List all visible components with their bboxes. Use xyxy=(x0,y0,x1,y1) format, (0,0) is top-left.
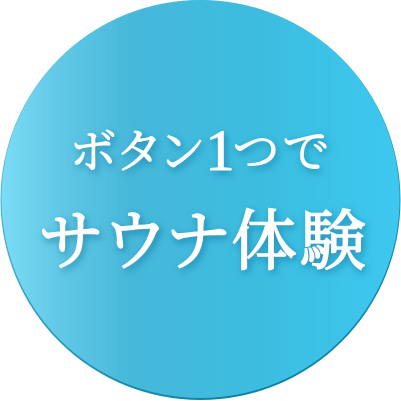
heading line 2: サウナ体験 xyxy=(38,206,366,279)
heading line 1: ボタン xyxy=(70,127,206,179)
heading line 1: 1 xyxy=(206,118,234,183)
heading line 1: つで xyxy=(232,127,330,179)
